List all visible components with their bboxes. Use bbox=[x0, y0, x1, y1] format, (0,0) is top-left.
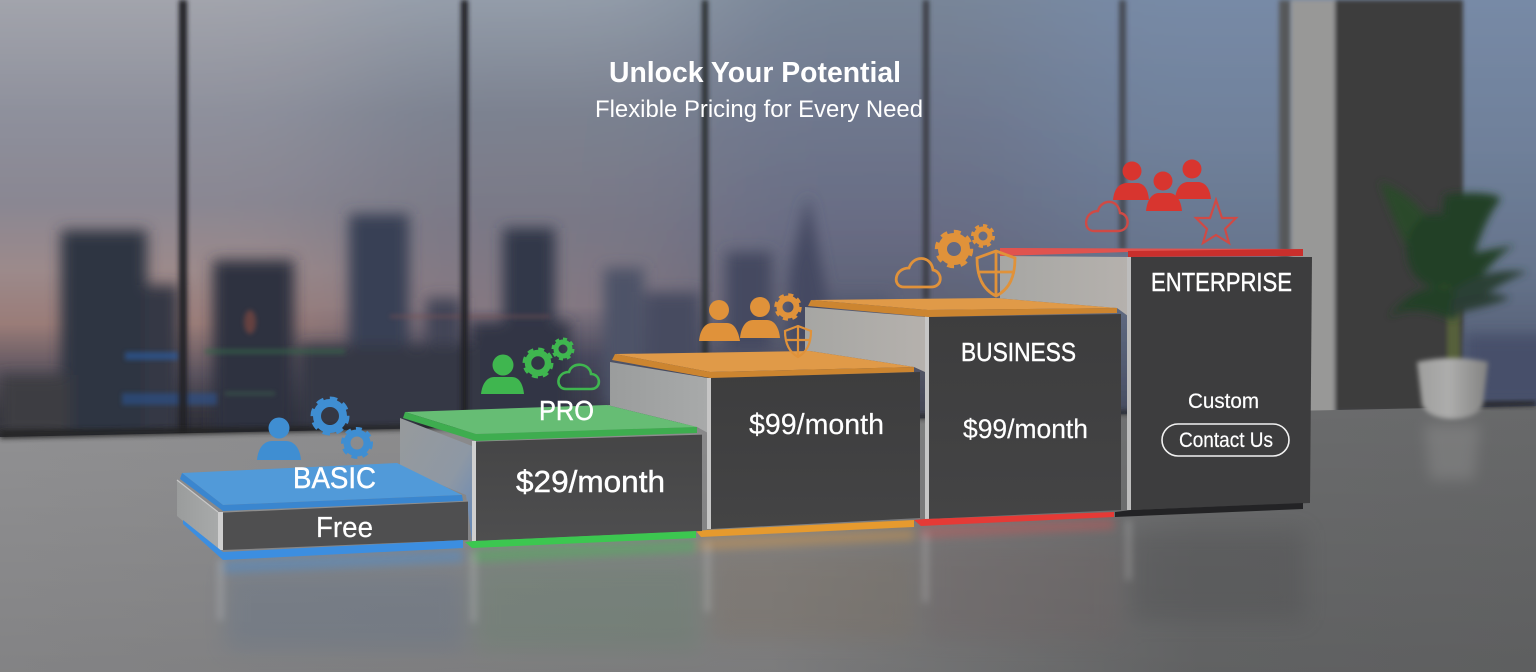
icon: shield bbox=[785, 326, 811, 357]
icon: gear small bbox=[972, 226, 994, 246]
floor bbox=[0, 406, 1536, 672]
subtitle: Flexible Pricing for Every Need bbox=[595, 96, 923, 123]
icon: shield bbox=[977, 251, 1015, 296]
icon: person bbox=[257, 418, 301, 460]
icon: star bbox=[1196, 200, 1236, 243]
icon: cloud bbox=[896, 258, 940, 287]
icon: gear large bbox=[313, 399, 347, 433]
floor reflections bbox=[225, 530, 1305, 650]
icon: two people bbox=[699, 297, 780, 341]
faint glowing lights bbox=[122, 310, 550, 405]
icon: person bbox=[481, 354, 524, 394]
columns bbox=[1291, 0, 1463, 420]
button: Contact Us: Contact Us bbox=[1179, 429, 1273, 452]
price: Custom: Custom bbox=[1188, 390, 1259, 413]
icon: cloud bbox=[558, 365, 599, 389]
label: PRO: PRO bbox=[539, 395, 594, 426]
label: BUSINESS: BUSINESS bbox=[961, 337, 1076, 367]
price: $99/month: $99/month bbox=[963, 414, 1088, 444]
price: $99/month: $99/month bbox=[749, 409, 884, 441]
icon: gear large bbox=[524, 350, 552, 376]
icon: gear small bbox=[553, 339, 573, 359]
step: BASIC bbox=[177, 399, 468, 560]
step: ENTERPRISE bbox=[995, 160, 1312, 517]
plant in white pot bbox=[1380, 182, 1528, 480]
window mullions bbox=[179, 0, 1291, 436]
label: ENTERPRISE: ENTERPRISE bbox=[1151, 267, 1292, 297]
icon: three people bbox=[1113, 160, 1211, 211]
label: BASIC: BASIC bbox=[293, 462, 376, 495]
icon: gear small bbox=[343, 429, 371, 457]
step: PRO bbox=[400, 339, 702, 548]
icon: gear bbox=[776, 295, 800, 319]
title: Unlock Your Potential bbox=[609, 57, 901, 89]
icon: cloud bbox=[1086, 202, 1128, 231]
icon: gear large bbox=[937, 232, 971, 266]
step: BUSINESS bbox=[805, 226, 1121, 526]
price: $29/month: $29/month bbox=[516, 464, 665, 499]
price: Free: Free bbox=[316, 512, 373, 544]
button: Contact Us bbox=[1162, 424, 1289, 456]
step: third tier bbox=[607, 295, 920, 537]
skyline bbox=[0, 195, 890, 440]
